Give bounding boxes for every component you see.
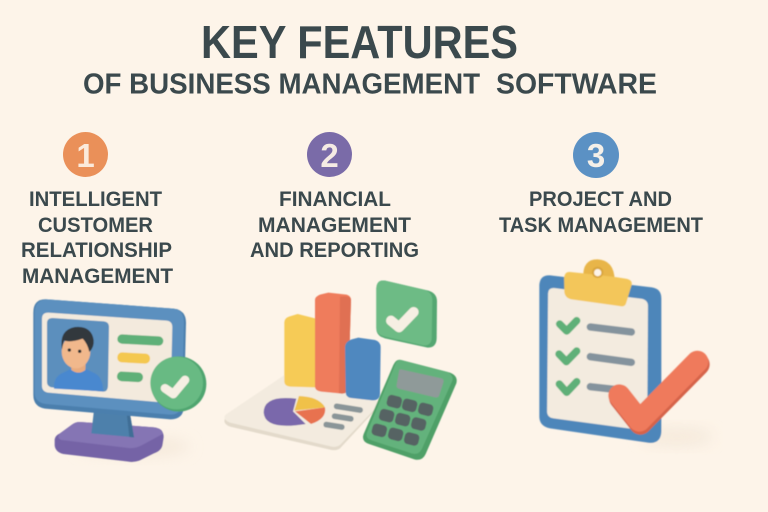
pie chart [264,396,325,426]
heading: feature 3 [499,188,703,237]
check badge [150,356,206,412]
number badge 1 [63,132,108,177]
text bars [117,334,164,346]
shoulders [54,369,103,391]
report sheet [224,376,382,450]
heading: feature 1: INTELLIGENT [29,188,162,211]
title: OF BUSINESS MANAGEMENT [83,68,481,100]
icon: CRM monitor [33,299,206,462]
clip [564,259,632,306]
check card [376,280,437,348]
number badge 2: 2 [320,137,339,174]
bar: red [315,293,351,394]
hair [61,327,94,352]
heading: feature 2: AND REPORTING [250,239,419,262]
checklist rows [559,321,577,392]
stand neck [91,410,134,437]
heading: feature 1: MANAGEMENT [22,265,173,288]
heading: feature 2: MANAGEMENT [258,214,411,237]
heading: feature 2: FINANCIAL [279,188,391,211]
monitor frame [33,299,186,419]
face [62,335,90,368]
avatar panel [47,318,109,392]
title [83,16,657,100]
title: KEY FEATURES [201,16,518,68]
calculator [363,360,457,460]
icon: clipboard with checklist [539,259,713,445]
icon: financial chart and calculator [224,280,457,460]
number badge 2 [307,132,352,177]
heading: feature 2 [250,188,419,262]
paper [547,288,648,430]
number badge 3 [573,132,619,178]
heading: feature 1: CUSTOMER [38,214,153,237]
stand base [55,422,164,462]
title: SOFTWARE [496,68,657,100]
heading: feature 1: RELATIONSHIP [21,239,172,262]
heading: feature 3: TASK MANAGEMENT [499,214,703,237]
number badge 1: 1 [76,137,95,174]
bar: yellow [284,314,315,387]
board [539,275,661,443]
large red check [619,362,698,423]
neck [71,362,86,373]
screen [42,313,172,403]
legend lines [333,403,363,413]
bar: blue [345,338,381,400]
number badge 3: 3 [587,137,605,174]
heading: feature 3: PROJECT AND [529,188,672,211]
heading: feature 1 [21,188,173,288]
